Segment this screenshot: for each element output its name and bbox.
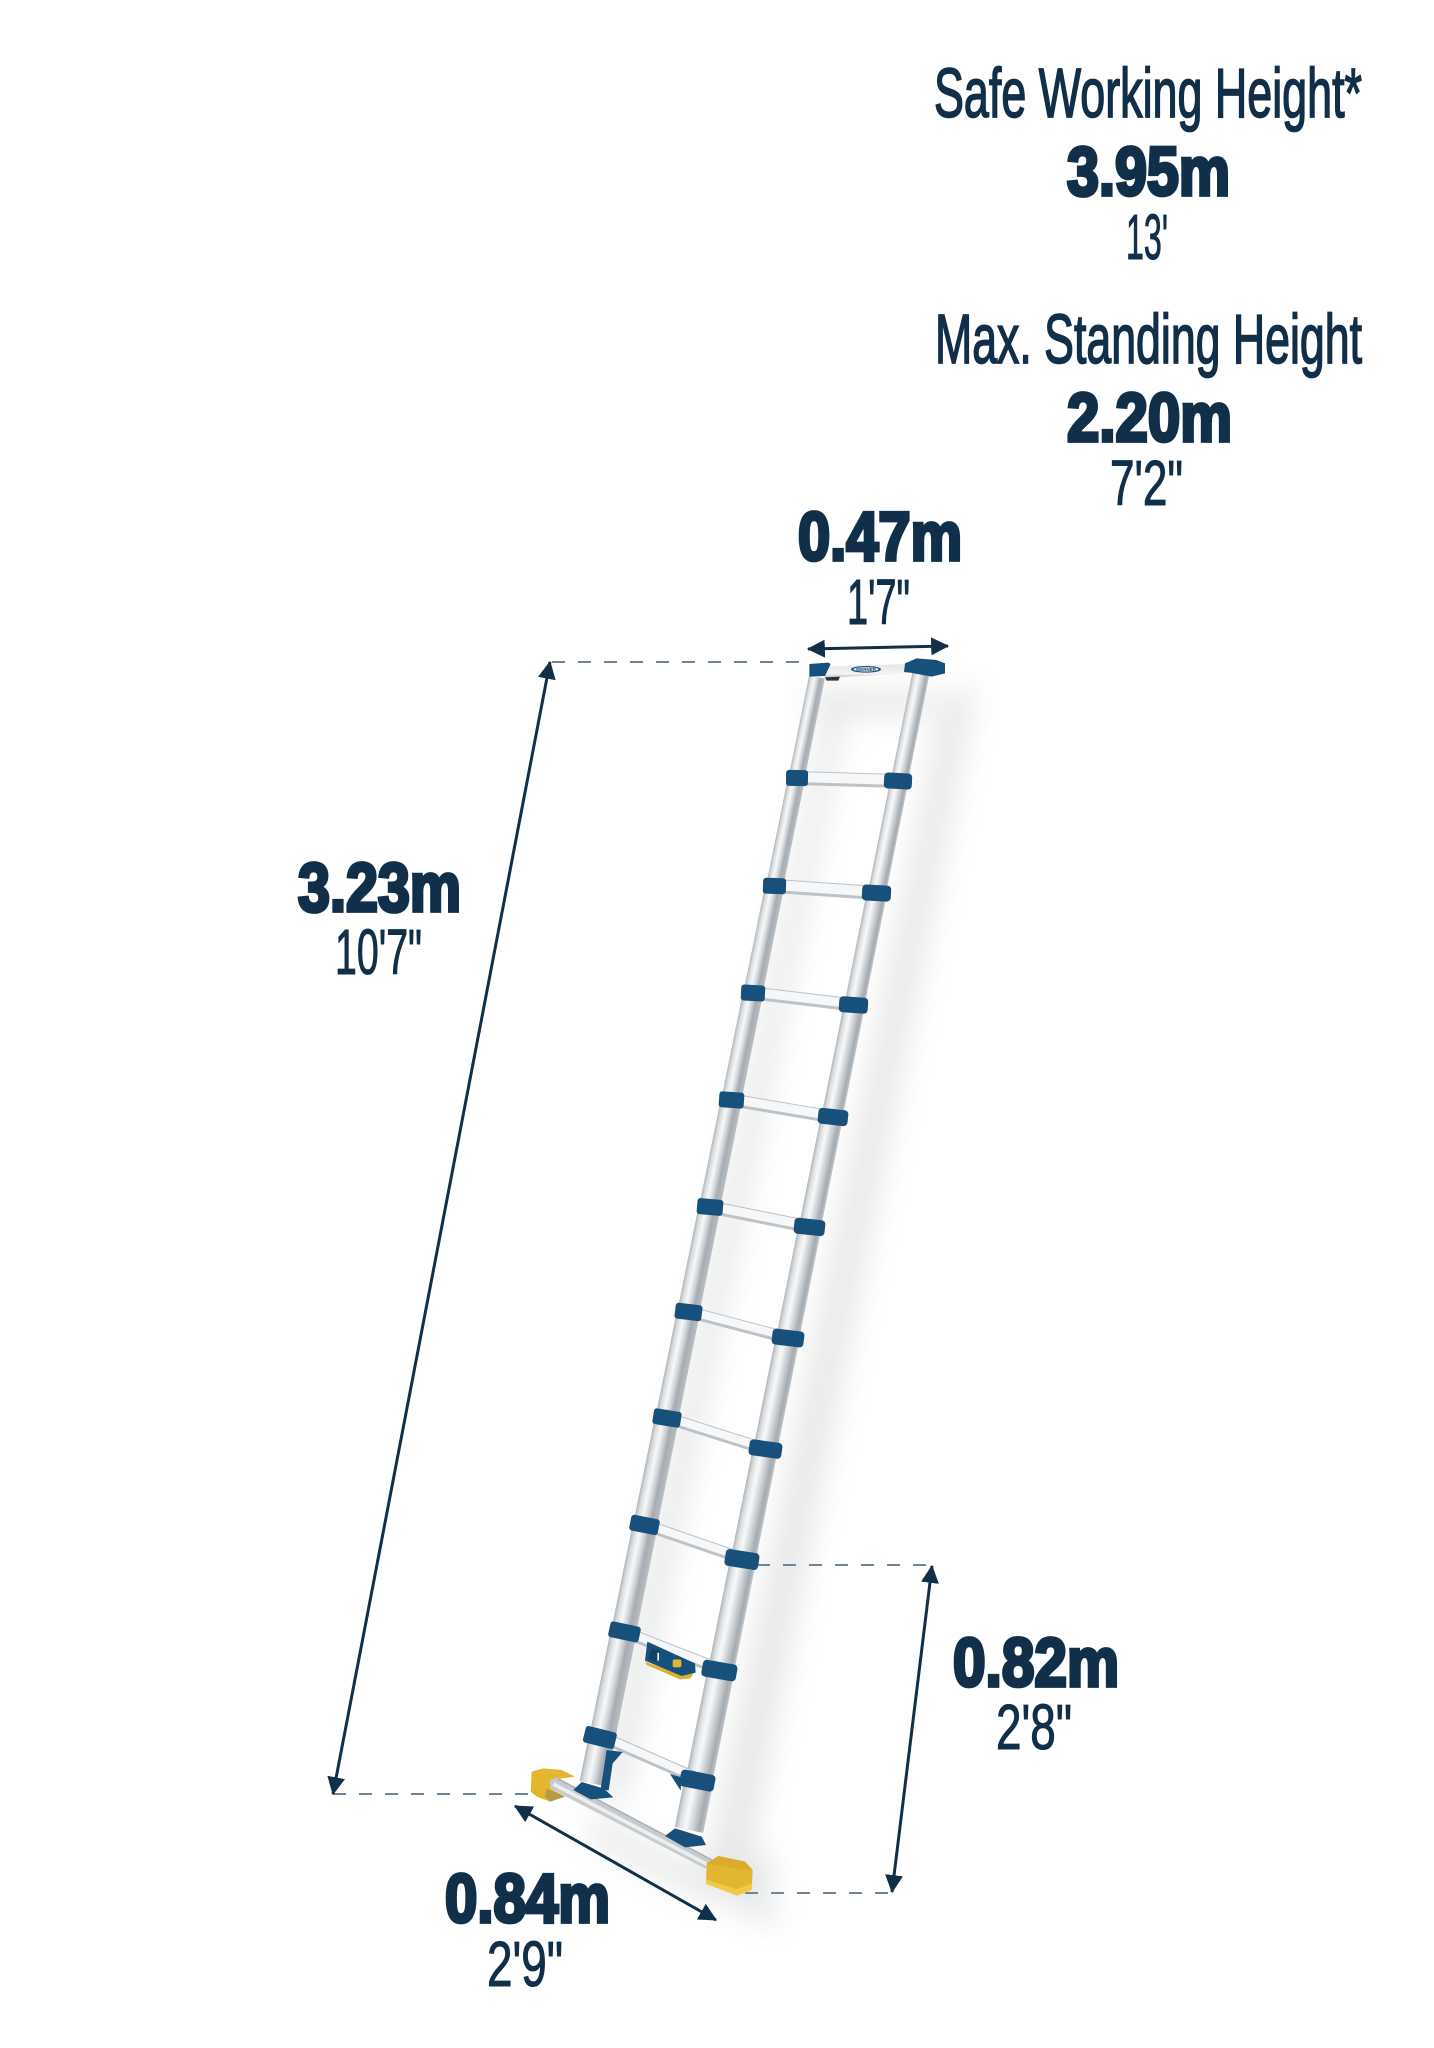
dimension: base width: [445, 1806, 716, 2000]
top rung with end caps and logo: [809, 658, 945, 681]
dimension: rung spacing: 2'8": [996, 1691, 1072, 1763]
spec: safe working height: 3.95m: [1067, 133, 1230, 210]
struts: [601, 1750, 623, 1791]
spec: max standing height: [935, 300, 1362, 519]
rungs: [602, 777, 899, 1780]
spec: safe working height: [934, 54, 1362, 273]
ladder shadow: [590, 690, 975, 1930]
dimension: base width: 2'9": [487, 1928, 563, 2000]
dimension: base width: 0.84m: [445, 1860, 610, 1937]
base stabiliser bar, brackets and yellow feet: [531, 1750, 753, 1896]
left rail: [580, 674, 830, 1786]
top rung with end caps and logo: WERNER: [856, 667, 877, 672]
dimension: rung spacing: [745, 1565, 1119, 1893]
stabiliser hook: [645, 1642, 696, 1679]
dimension: closed length: [298, 662, 810, 1794]
cross bar: [550, 1777, 717, 1868]
right rail: [675, 670, 935, 1833]
rail clamps: [582, 770, 912, 1792]
dimension: top width: [798, 498, 962, 649]
right bracket: [665, 1828, 706, 1847]
spec: max standing height: 2.20m: [1067, 379, 1232, 456]
dimension: closed length: 10'7": [335, 916, 422, 988]
dimension: closed length: 3.23m: [298, 849, 461, 926]
spec: max standing height: 7'2": [1110, 447, 1183, 519]
dimension: top width: 1'7": [847, 566, 910, 638]
dimension: rung spacing: 0.82m: [953, 1624, 1119, 1701]
left bracket: [573, 1782, 613, 1799]
left foot: [531, 1768, 575, 1802]
dimension: top width: 0.47m: [798, 498, 962, 575]
right foot: [706, 1856, 753, 1896]
ladder: [531, 658, 945, 1896]
spec: safe working height: 13': [1126, 201, 1168, 273]
